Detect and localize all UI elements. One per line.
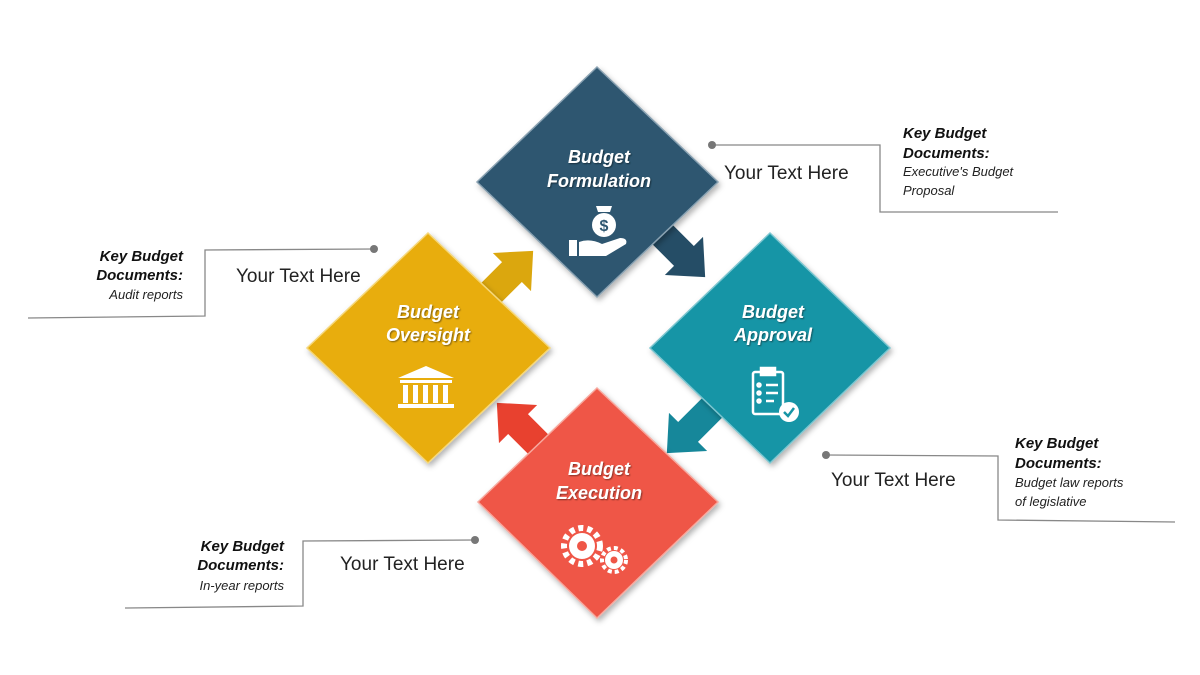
callout: bottom left: In-year reports — [199, 578, 284, 593]
callout: bottom right: Your Text Here — [831, 470, 956, 491]
callout: top right: Key Budget — [903, 125, 987, 142]
diamond: budget formulation — [477, 67, 718, 297]
icon: money in hand: $ — [600, 218, 609, 235]
callout: top right — [708, 125, 1058, 212]
diamond: budget formulation: Formulation — [547, 171, 651, 191]
diamond: budget oversight: Budget — [397, 302, 460, 322]
callout: left: Your Text Here — [236, 266, 361, 287]
callout: bottom left: Your Text Here — [340, 554, 465, 575]
arrow: execution to oversight — [478, 384, 571, 477]
icon: clipboard — [753, 368, 783, 414]
icon: gears — [564, 528, 626, 572]
callout: top right: Executive's Budget — [903, 164, 1015, 179]
diamond: budget formulation: Budget — [568, 147, 631, 167]
diamond: budget oversight — [307, 233, 550, 463]
diamond: budget execution: Budget — [568, 459, 631, 479]
diamond: budget approval — [650, 233, 890, 463]
diamond: budget approval: Budget — [742, 302, 805, 322]
callout: left: Key Budget — [100, 248, 184, 265]
diamond: budget execution — [478, 388, 718, 618]
callout: bottom right: of legislative — [1015, 494, 1087, 509]
icon: money in hand — [569, 206, 626, 256]
diamond: budget oversight: Oversight — [386, 325, 471, 345]
arrow: formulation to approval — [631, 203, 724, 296]
callout: bottom left: Key Budget — [201, 538, 285, 555]
callout: top right: Documents: — [903, 145, 990, 162]
callout: bottom right: Key Budget — [1015, 435, 1099, 452]
diamond: budget execution: Execution — [556, 483, 642, 503]
callout: bottom right: Documents: — [1015, 455, 1102, 472]
arrow: approval to execution — [648, 379, 741, 472]
icon: bank — [398, 366, 454, 408]
callout: top right: Your Text Here — [724, 163, 849, 184]
callout: bottom left: Documents: — [197, 557, 284, 574]
callout: bottom right: Budget law reports — [1015, 475, 1124, 490]
diamond: budget approval: Approval — [733, 325, 813, 345]
callout: left — [28, 245, 378, 318]
callout: left: Audit reports — [108, 287, 183, 302]
callout: left: Documents: — [96, 267, 183, 284]
callout: bottom right — [822, 435, 1175, 522]
callout: bottom left — [125, 536, 479, 608]
callout: top right: Proposal — [903, 183, 955, 198]
arrow: oversight to formulation — [459, 232, 552, 325]
